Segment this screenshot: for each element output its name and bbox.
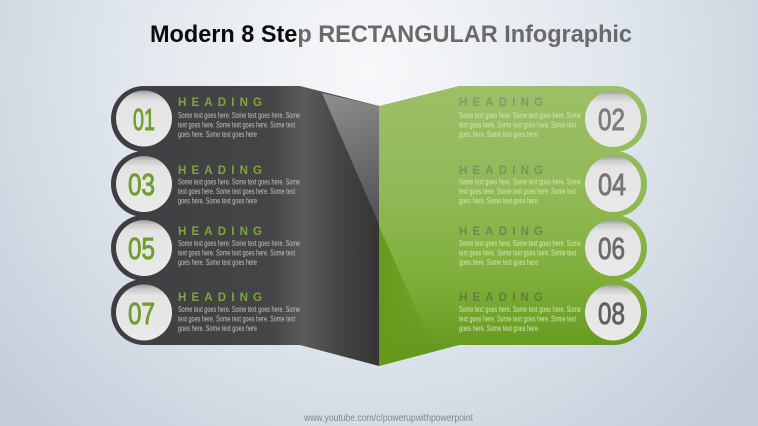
step 01: HEADING [178, 97, 262, 109]
step 01: text goes here. Some text goes here. Some text [178, 120, 296, 130]
step 03: Some text goes here. Some text goes here. Some [178, 178, 300, 186]
step 08: HEADING [459, 292, 543, 304]
step 07 [116, 284, 300, 340]
fold shadow [379, 226, 459, 366]
step 04: goes here. Some text goes here [459, 196, 538, 206]
title: Modern 8 Step RECTANGULAR Infographic [150, 21, 632, 48]
step 05: 05 [128, 231, 155, 266]
step 07: HEADING [178, 292, 262, 304]
step 04 [459, 156, 641, 212]
footer url: www.youtube.com/c/powerupwithpowerpoint [303, 413, 473, 424]
step 07: Some text goes here. Some text goes here. Some [178, 305, 300, 314]
step 02: text goes here. Some text goes here. Some text [459, 120, 577, 130]
step 06: 06 [598, 231, 625, 266]
step 06: Some text goes here. Some text goes here. Some [459, 239, 581, 248]
step 01 [116, 90, 300, 146]
step 05: goes here. Some text goes here [178, 258, 257, 267]
green folded panel shape [379, 86, 647, 366]
step 08: 08 [598, 296, 625, 331]
step 05: text goes here. Some text goes here. Some text [178, 248, 296, 258]
step 08 [459, 284, 641, 340]
step 03 [116, 156, 300, 212]
fold highlight [322, 93, 379, 224]
step 01: goes here. Some text goes here [178, 130, 257, 139]
step 04: 04 [598, 167, 626, 202]
step 05 [116, 220, 300, 276]
step 03: 03 [128, 167, 155, 202]
step 08: text goes here. Some text goes here. Some text [459, 314, 577, 324]
panel: left dark steps [111, 86, 379, 366]
step 06: text goes here. Some text goes here. Some text [459, 248, 577, 258]
step 06: goes here. Some text goes here [459, 258, 538, 267]
step 02: 02 [598, 102, 625, 137]
step 07: text goes here. Some text goes here. Some text [178, 314, 296, 324]
panel: right green steps [379, 86, 647, 366]
step 02 [459, 91, 641, 147]
step 05: Some text goes here. Some text goes here. Some [178, 239, 300, 248]
step 02: HEADING [459, 97, 543, 109]
dark folded panel shape [111, 86, 379, 366]
step 02: goes here. Some text goes here [459, 130, 538, 139]
step 03: goes here. Some text goes here [178, 196, 257, 206]
step 06 [459, 220, 641, 276]
step 02: Some text goes here. Some text goes here. Some [459, 111, 581, 120]
step 04: Some text goes here. Some text goes here. Some [459, 178, 581, 186]
step 07: 07 [128, 296, 155, 331]
step 05: HEADING [178, 226, 262, 238]
step 08: Some text goes here. Some text goes here. Some [459, 305, 581, 314]
step 03: HEADING [178, 165, 262, 177]
step 08: goes here. Some text goes here [459, 324, 538, 333]
step 03: text goes here. Some text goes here. Some text [178, 187, 296, 196]
step 01: Some text goes here. Some text goes here. Some [178, 111, 300, 120]
step 04: text goes here. Some text goes here. Some text [459, 187, 577, 196]
step 06: HEADING [459, 226, 543, 238]
step 01: 01 [133, 102, 155, 137]
step 07: goes here. Some text goes here [178, 324, 257, 333]
step 04: HEADING [459, 165, 543, 177]
